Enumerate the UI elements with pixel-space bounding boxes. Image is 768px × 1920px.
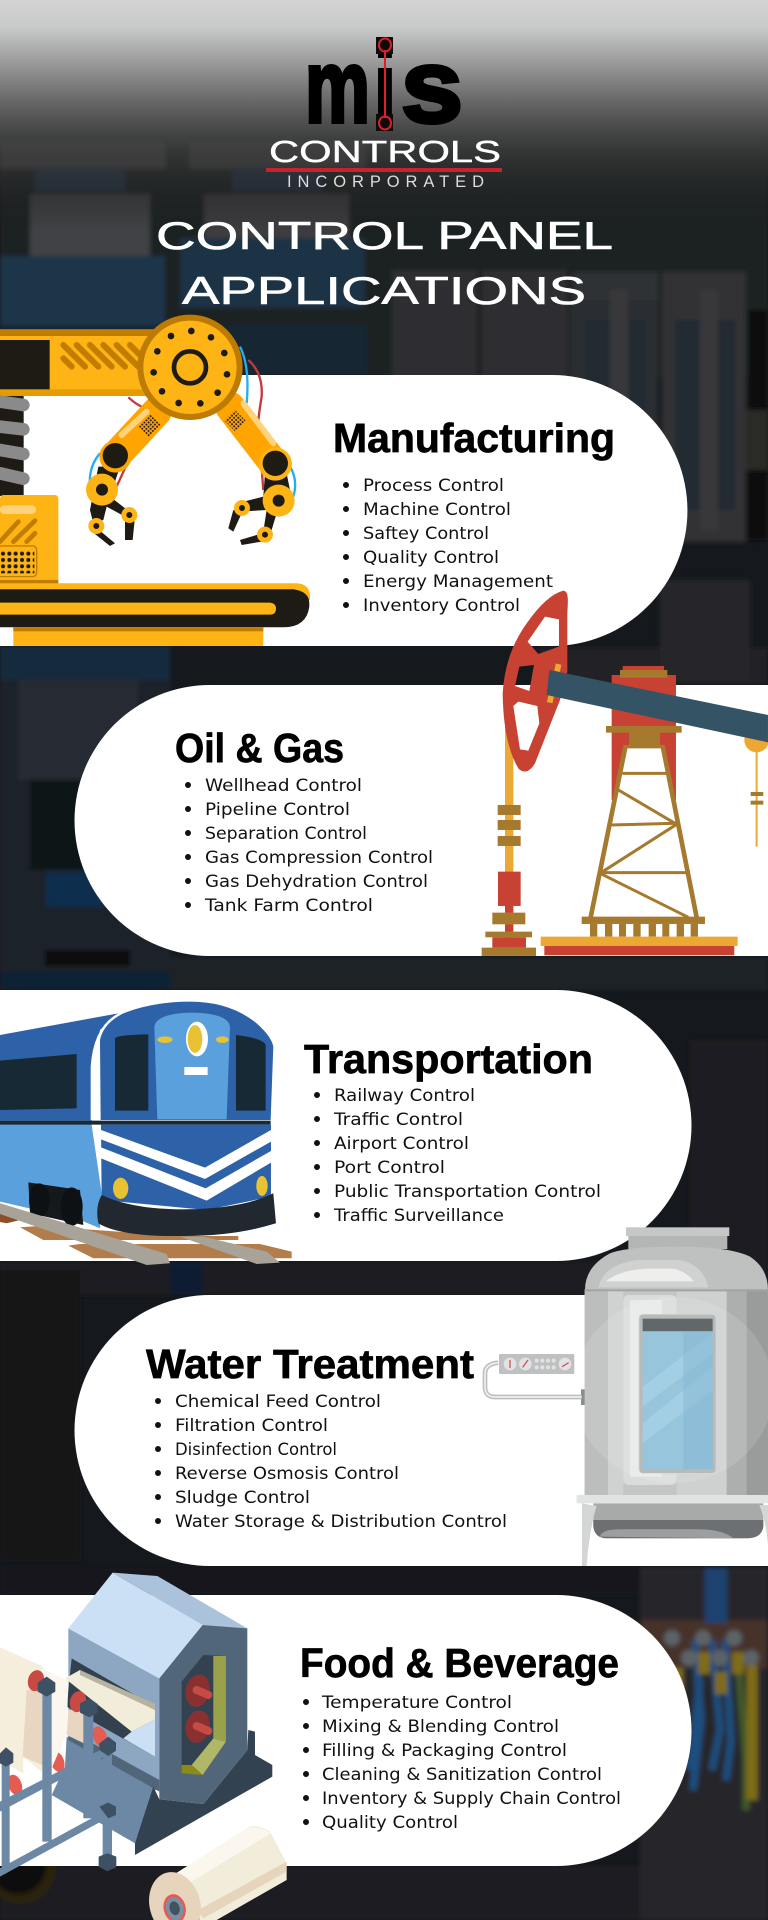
list: manufacturing items xyxy=(343,476,553,616)
list: food and beverage items: Cleaning & Sanitization Control xyxy=(322,1765,602,1785)
list: oil and gas items: Gas Dehydration Control xyxy=(205,872,428,892)
list: food and beverage items: Filling & Packaging Control xyxy=(322,1741,567,1761)
heading: oil and gas: Oil & Gas xyxy=(175,725,344,771)
list: oil and gas items xyxy=(185,776,433,916)
list: food and beverage items xyxy=(303,1693,621,1833)
heading: food and beverage: Food & Beverage xyxy=(300,1640,619,1686)
list: transportation items: Port Control xyxy=(334,1158,445,1178)
logo: MIS Controls Incorporated xyxy=(266,29,502,191)
logo wordmark: mis: i xyxy=(371,30,399,146)
list: transportation items: Railway Control xyxy=(334,1086,475,1106)
list: food and beverage items: Mixing & Blending Control xyxy=(322,1717,559,1737)
list: transportation items xyxy=(314,1086,601,1226)
list: manufacturing items: Machine Control xyxy=(363,500,511,520)
icon: packaging machine with film roll xyxy=(0,1573,287,1920)
list: water treatment items: Water Storage & Distribution Control xyxy=(175,1512,507,1532)
logo wordmark: mis xyxy=(305,29,463,146)
list: food and beverage items: Temperature Control xyxy=(321,1693,512,1713)
list: transportation items: Public Transportation Control xyxy=(334,1182,601,1202)
list: water treatment items: Disinfection Control xyxy=(175,1440,337,1460)
icon: oil pump jack xyxy=(482,591,768,956)
list: manufacturing items: Process Control xyxy=(363,476,504,496)
list: transportation items: Traffic Surveillance xyxy=(333,1206,504,1226)
list: food and beverage items: Quality Control xyxy=(322,1813,458,1833)
icon: steel water tank with gauge panel xyxy=(485,1227,768,1566)
title: CONTROL PANEL xyxy=(156,215,613,258)
logo wordmark: mis: s xyxy=(401,29,463,145)
list: water treatment items: Reverse Osmosis Control xyxy=(175,1464,399,1484)
list: food and beverage items: Inventory & Supply Chain Control xyxy=(322,1789,621,1809)
logo pin: red connector xyxy=(376,37,393,131)
list: transportation items: Traffic Control xyxy=(333,1110,463,1130)
list: water treatment items xyxy=(155,1392,507,1532)
logo wordmark: mis: m xyxy=(305,29,370,145)
list: manufacturing items: Inventory Control xyxy=(363,596,520,616)
list: water treatment items: Chemical Feed Control xyxy=(175,1392,381,1412)
list: oil and gas items: Gas Compression Control xyxy=(205,848,433,868)
icon: robot arm on conveyor xyxy=(0,315,310,646)
panel: food and beverage xyxy=(0,1573,692,1920)
list: water treatment items: Filtration Control xyxy=(175,1416,328,1436)
heading: manufacturing: Manufacturing xyxy=(333,415,615,461)
heading: transportation: Transportation xyxy=(304,1036,593,1082)
title: APPLICATIONS xyxy=(182,270,586,313)
logo text: INCORPORATED: INCORPORATED xyxy=(287,173,484,191)
list: manufacturing items: Quality Control xyxy=(363,548,499,568)
panel: manufacturing xyxy=(0,315,687,646)
list: oil and gas items: Pipeline Control xyxy=(205,800,350,820)
list: oil and gas items: Wellhead Control xyxy=(205,776,362,796)
list: manufacturing items: Energy Management xyxy=(363,572,553,592)
list: oil and gas items: Tank Farm Control xyxy=(204,896,373,916)
panel: water treatment xyxy=(75,1227,768,1566)
list: transportation items: Airport Control xyxy=(334,1134,469,1154)
icon: blue train on rails xyxy=(0,1002,292,1265)
panel: oil and gas xyxy=(75,591,768,956)
list: oil and gas items: Separation Control xyxy=(205,824,367,844)
logo text: CONTROLS: CONTROLS xyxy=(269,134,501,169)
list: water treatment items: Sludge Control xyxy=(175,1488,310,1508)
panel: transportation xyxy=(0,990,692,1265)
heading: water treatment: Water Treatment xyxy=(146,1341,474,1387)
title xyxy=(156,215,613,313)
list: manufacturing items: Saftey Control xyxy=(363,524,489,544)
